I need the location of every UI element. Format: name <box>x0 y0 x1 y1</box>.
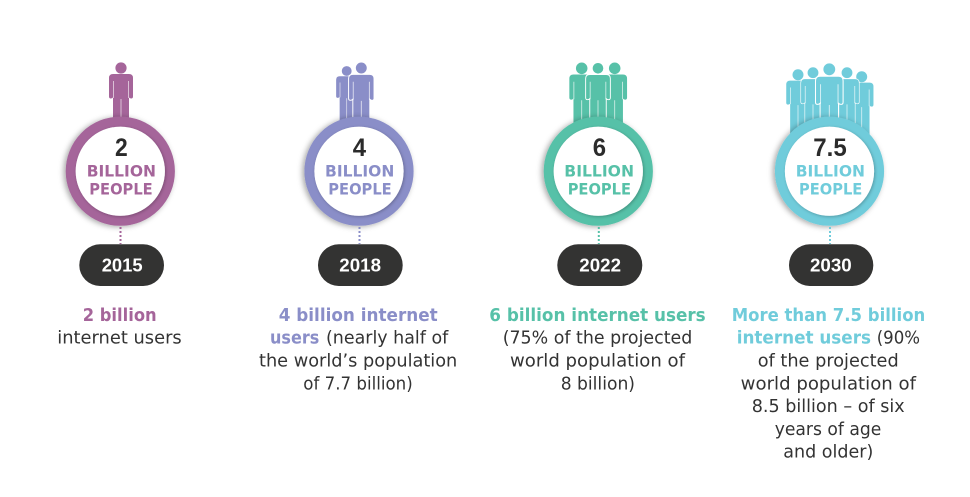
ring: 7.5 billion people: BILLION <box>796 162 865 181</box>
description: 2015: internet users <box>57 328 182 349</box>
description: 2030: internet users <box>737 328 871 349</box>
ring: 4 billion people: BILLION <box>325 162 394 181</box>
ring: 6 billion people: PEOPLE <box>568 179 631 198</box>
description: 2018: 4 billion internet <box>279 305 438 326</box>
year pill: 2015: 2015 <box>102 255 143 276</box>
ring: 2 billion people <box>71 122 170 221</box>
description: 2030: of the projected <box>758 350 899 371</box>
year pill: 2022: 2022 <box>579 255 621 276</box>
description: 2030 <box>732 305 925 463</box>
description: 2018: the world’s population <box>259 350 457 371</box>
icon: five people <box>786 63 873 141</box>
description: 2022: (75% of the projected <box>503 328 692 349</box>
description: 2018 <box>259 305 457 394</box>
description: 2022: 8 billion) <box>561 373 635 394</box>
year pill: 2015 <box>79 244 164 286</box>
ring: 6 billion people <box>549 122 648 221</box>
ring: 6 billion people: BILLION <box>564 162 634 181</box>
year pill: 2030 <box>789 244 873 286</box>
year pill: 2022 <box>557 244 642 286</box>
description: 2022: 6 billion internet users <box>489 305 706 326</box>
description: 2022 <box>489 305 706 394</box>
connector <box>598 227 600 244</box>
icon: three people <box>569 63 627 132</box>
description: 2030: world population of <box>741 373 917 394</box>
connector <box>120 227 122 244</box>
description: 2030: (90% <box>877 328 920 349</box>
description: 2015: 2 billion <box>83 305 157 326</box>
ring: 2 billion people: PEOPLE <box>89 179 153 198</box>
ring: 4 billion people <box>309 122 409 221</box>
description: 2030: More than 7.5 billion <box>732 305 925 326</box>
year pill: 2018 <box>318 244 403 286</box>
column: 2018 <box>259 62 457 394</box>
description: 2018: (nearly half of <box>326 328 449 349</box>
ring: 7.5 billion people: PEOPLE <box>799 179 862 198</box>
description: 2030: 8.5 billion – of six <box>752 396 905 417</box>
year pill: 2030: 2030 <box>810 255 852 276</box>
ring: 7.5 billion people: 7.5 <box>813 134 847 162</box>
icon: two people <box>336 62 374 134</box>
icon: one person <box>109 62 133 130</box>
description: 2030: years of age <box>775 419 881 440</box>
ring: 6 billion people: 6 <box>593 134 606 162</box>
connector <box>358 227 360 244</box>
ring: 2 billion people: 2 <box>115 134 128 162</box>
description: 2015 <box>57 305 182 349</box>
column: 2015 <box>57 62 182 349</box>
description: 2030: and older) <box>783 442 873 463</box>
ring: 2 billion people: BILLION <box>87 162 156 181</box>
connector <box>829 227 831 244</box>
column: 2022 <box>489 63 706 394</box>
description: 2018: users <box>270 328 319 349</box>
year pill: 2018: 2018 <box>339 255 381 276</box>
ring: 4 billion people: 4 <box>353 134 366 162</box>
ring: 7.5 billion people <box>780 122 879 221</box>
description: 2018: of 7.7 billion) <box>303 373 413 394</box>
column: 2030 <box>732 63 925 463</box>
ring: 4 billion people: PEOPLE <box>328 179 392 198</box>
description: 2022: world population of <box>510 350 686 371</box>
